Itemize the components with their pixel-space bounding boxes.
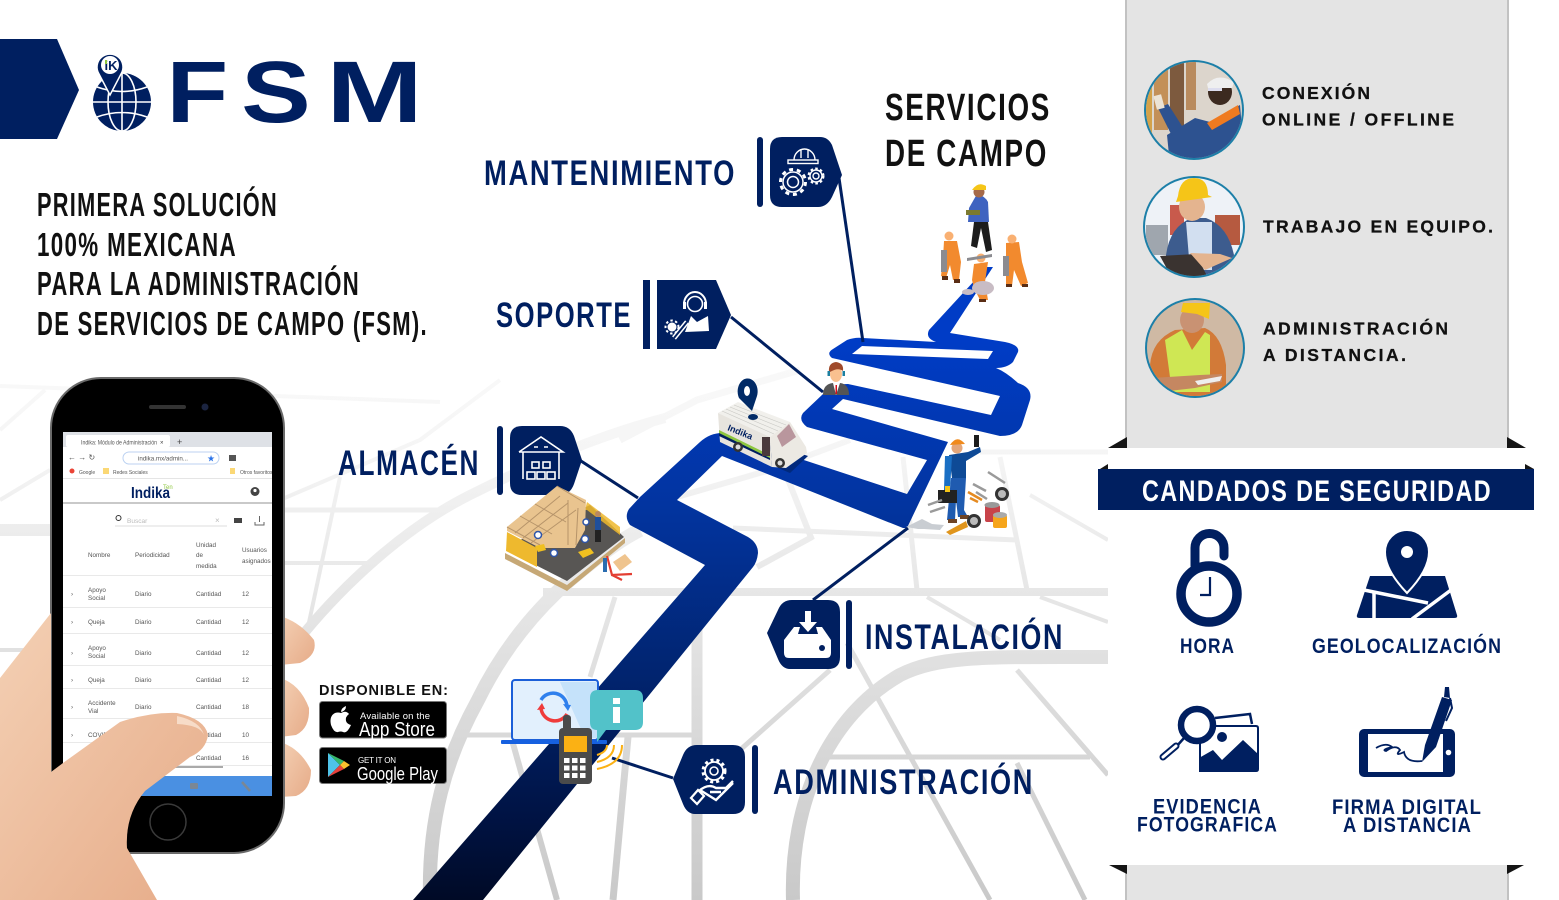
hand: back fingers xyxy=(280,616,315,797)
connector: almacén xyxy=(581,461,638,498)
badge: google play xyxy=(320,748,446,784)
headline text: DE SERVICIOS DE CAMPO (FSM). xyxy=(37,305,428,342)
label: hora: HORA xyxy=(1180,635,1235,658)
text: administración a distancia xyxy=(1263,318,1448,365)
heading: servicios de campo xyxy=(885,87,1051,175)
phone screen: asignados xyxy=(242,558,271,565)
phone screen: ★ xyxy=(207,454,215,464)
phone screen: 12 xyxy=(242,619,250,626)
label: mantenimiento: MANTENIMIENTO xyxy=(484,154,736,193)
phone screen: Indika xyxy=(131,485,170,502)
phone screen: › xyxy=(71,755,73,762)
phone screen: Queja xyxy=(88,619,105,626)
text: conexión online / offline: ONLINE / OFFLINE xyxy=(1262,110,1454,130)
headline text: PARA LA ADMINISTRACIÓN xyxy=(37,265,360,302)
phone screen: Indika: Módulo de Administración xyxy=(81,440,157,446)
phone screen: Accidente xyxy=(88,700,116,707)
photo: remote admin worker xyxy=(1145,298,1245,398)
label: soporte xyxy=(496,280,731,349)
connector: soporte xyxy=(731,317,823,392)
illustration: field workers xyxy=(941,184,1028,302)
label: evidencia fotográfica: FOTOGRAFICA xyxy=(1137,814,1278,836)
badge: google play: GET IT ON xyxy=(358,756,396,765)
headline text xyxy=(37,186,428,342)
phone screen: Social xyxy=(88,653,105,660)
illustration: warehouse xyxy=(505,486,632,591)
heading band xyxy=(1098,469,1534,510)
illustration: laptop with sync xyxy=(501,680,607,744)
phone screen: de xyxy=(196,552,204,559)
text: administración a distancia: ADMINISTRACIÓN xyxy=(1263,318,1448,338)
phone screen: › xyxy=(71,650,73,657)
phone screen: › xyxy=(71,732,73,739)
text: conexión online / offline xyxy=(1262,82,1454,130)
logo: FSM wordmark xyxy=(167,43,423,141)
icon: geolocation map xyxy=(1357,530,1457,619)
logo: FSM wordmark: F xyxy=(167,44,228,140)
phone screen: + xyxy=(177,437,182,447)
illustration: headset agent xyxy=(823,362,849,395)
illustration: installer with tools xyxy=(906,435,1009,535)
label: almacén: ALMACÉN xyxy=(338,443,480,483)
phone screen: Cantidad xyxy=(196,650,222,657)
phone screen: indika.mx/admin... xyxy=(138,456,188,462)
label: almacén xyxy=(338,426,582,495)
badge: app store xyxy=(320,702,446,741)
label: administración xyxy=(673,745,1034,814)
label: evidencia fotográfica xyxy=(1137,796,1278,836)
phone screen: Nombre xyxy=(88,552,111,559)
badge: google play: Google Play xyxy=(357,763,439,784)
phone screen: › xyxy=(71,677,73,684)
phone screen: Otros favoritos xyxy=(240,470,273,476)
left header arrow xyxy=(0,39,79,139)
route road xyxy=(413,267,1030,900)
phone screen: Cantidad xyxy=(196,755,222,762)
text: trabajo en equipo: TRABAJO EN EQUIPO. xyxy=(1263,216,1493,236)
text: conexión online / offline: CONEXIÓN xyxy=(1262,82,1370,103)
icon: padlock clock xyxy=(1181,534,1237,622)
logo: globe with pin xyxy=(93,54,151,131)
logo: FSM wordmark: S xyxy=(241,44,311,141)
panel: candados de seguridad xyxy=(1098,437,1534,874)
phone screen: 12 xyxy=(242,591,250,598)
badge: app store: Available on the xyxy=(360,711,430,722)
logo: globe with pin: iK xyxy=(104,58,118,73)
phone screen: Redes Sociales xyxy=(113,470,148,476)
label: geolocalización: GEOLOCALIZACIÓN xyxy=(1312,634,1502,658)
phone screen: Diario xyxy=(135,619,152,626)
phone screen: Buscar xyxy=(127,518,148,525)
phone screen: Periodicidad xyxy=(135,552,170,559)
logo: FSM wordmark: M xyxy=(326,43,423,141)
icon: digital signature tablet xyxy=(1359,687,1455,777)
phone screen: COVID-19 xyxy=(88,732,118,739)
label: administración: ADMINISTRACIÓN xyxy=(773,762,1034,802)
phone screen: › xyxy=(71,619,73,626)
icon: photo evidence xyxy=(1163,709,1258,771)
phone screen: Vial xyxy=(88,708,98,715)
phone screen: Apoyo xyxy=(88,587,106,594)
label: evidencia fotográfica: EVIDENCIA xyxy=(1153,796,1262,818)
phone screen: 12 xyxy=(242,650,250,657)
illustration: delivery van xyxy=(718,402,808,473)
phone screen: Ten xyxy=(163,485,173,491)
phone screen: › xyxy=(71,704,73,711)
photo: teamwork worker xyxy=(1143,176,1245,278)
hand: palm and thumb xyxy=(0,613,208,900)
headline text: 100% MEXICANA xyxy=(37,226,237,263)
phone screen: 18 xyxy=(242,704,250,711)
phone screen: Diario xyxy=(135,704,152,711)
phone screen: Social xyxy=(88,595,105,602)
connector: administración xyxy=(612,758,673,778)
phone screen: Google xyxy=(79,470,95,476)
phone screen: Cantidad xyxy=(196,591,222,598)
label: mantenimiento xyxy=(484,137,842,207)
photo: connection worker xyxy=(1144,60,1244,160)
phone screen: medida xyxy=(196,563,217,570)
phone screen: Cantidad xyxy=(196,732,222,739)
connector: instalación xyxy=(813,528,908,600)
phone screen: 16 xyxy=(242,755,250,762)
phone screen: Cantidad xyxy=(196,677,222,684)
label: firma digital a distancia xyxy=(1332,796,1482,837)
phone screen: 12 xyxy=(242,677,250,684)
badge: app store: App Store xyxy=(359,719,435,741)
store section heading: DISPONIBLE EN: xyxy=(319,683,448,699)
phone screen: Cantidad xyxy=(196,619,222,626)
phone screen: × xyxy=(215,516,220,525)
phone screen xyxy=(63,432,273,796)
right gray panel xyxy=(1125,0,1509,900)
heading: servicios de campo: DE CAMPO xyxy=(885,133,1048,175)
label: firma digital a distancia: A DISTANCIA xyxy=(1343,814,1472,837)
label: instalación xyxy=(767,600,1064,669)
label: firma digital a distancia: FIRMA DIGITAL xyxy=(1332,796,1482,819)
phone screen: Apoyo xyxy=(88,645,106,652)
phone screen: Diario xyxy=(135,650,152,657)
label: instalación: INSTALACIÓN xyxy=(865,617,1064,657)
heading: servicios de campo: SERVICIOS xyxy=(885,87,1051,129)
illustration: delivery van: Indika xyxy=(726,423,755,442)
icon: walkie talkie xyxy=(559,715,622,784)
phone screen: 10 xyxy=(242,732,250,739)
phone screen: Diario xyxy=(135,677,152,684)
phone screen: Usuarios xyxy=(242,547,267,554)
text: administración a distancia: A DISTANCIA. xyxy=(1263,345,1406,365)
phone screen: Queja xyxy=(88,677,105,684)
headline text: PRIMERA SOLUCIÓN xyxy=(37,186,278,223)
icon: info bubble xyxy=(590,690,643,742)
phone xyxy=(51,378,284,853)
phone screen: × xyxy=(160,440,164,446)
connector: mantenimiento xyxy=(839,178,863,342)
icon: van location pin xyxy=(738,378,758,420)
phone screen: Unidad xyxy=(196,542,216,549)
background street map xyxy=(0,370,1108,900)
label: soporte: SOPORTE xyxy=(496,296,632,335)
phone screen: Diario xyxy=(135,591,152,598)
phone screen: ← → ↻ xyxy=(68,453,95,462)
phone screen: Cantidad xyxy=(196,704,222,711)
phone screen: › xyxy=(71,591,73,598)
